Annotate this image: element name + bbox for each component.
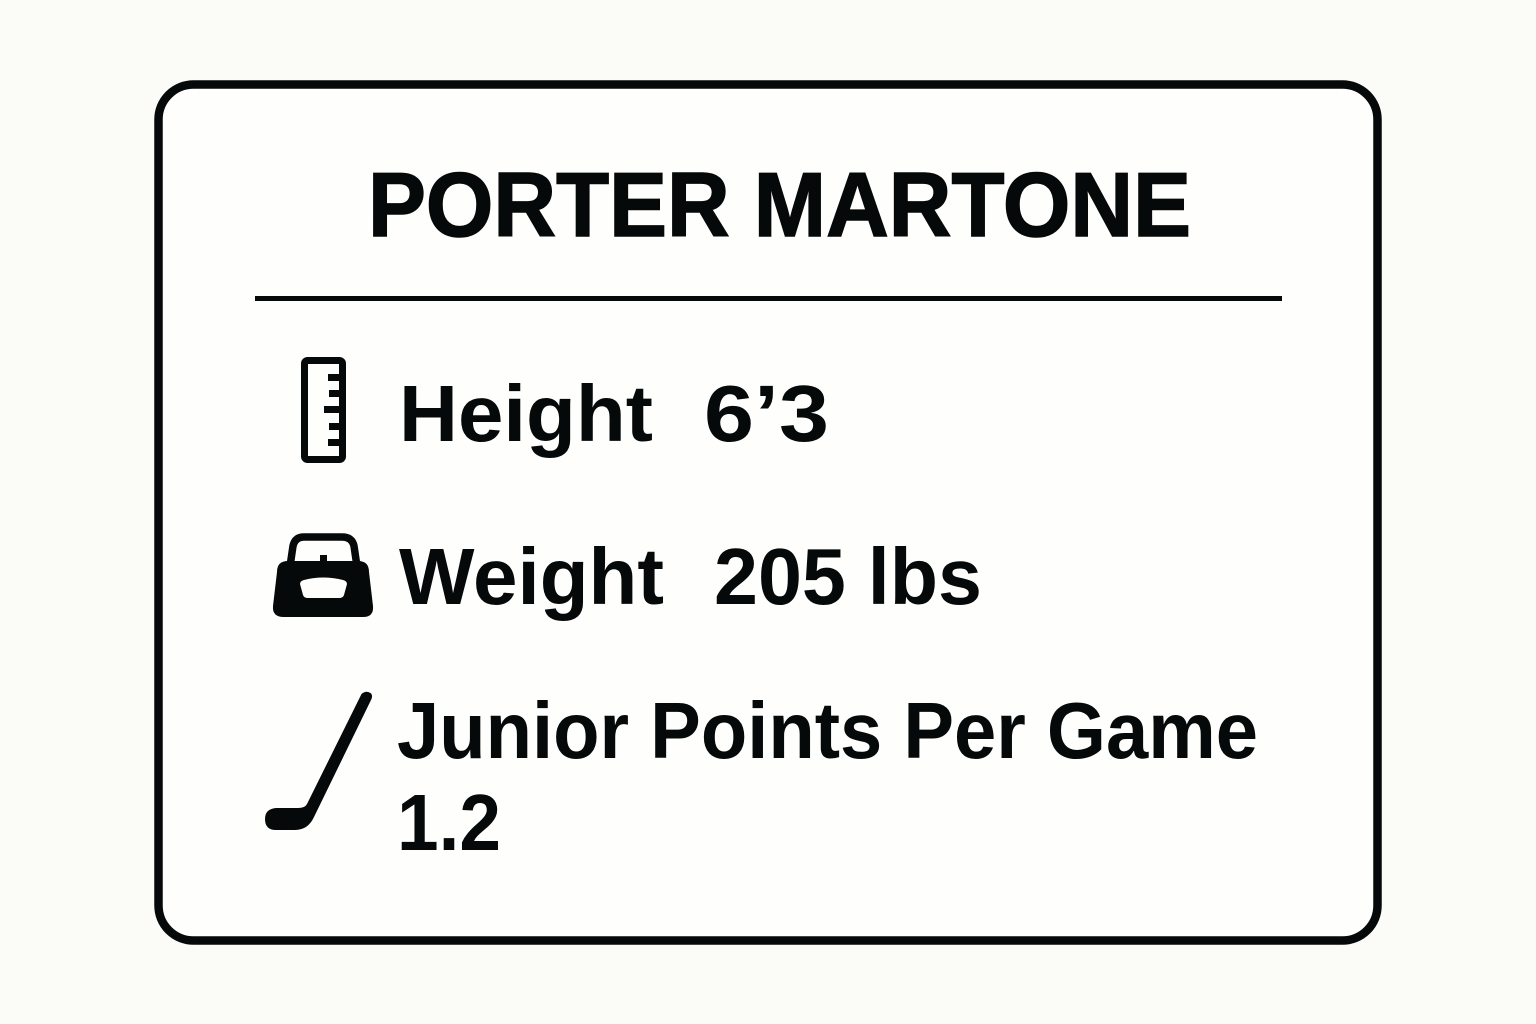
weight row: 205 lbs xyxy=(714,532,982,621)
points per game xyxy=(397,686,1258,867)
height row xyxy=(399,369,829,458)
height row: Height xyxy=(399,369,653,458)
icon: hockey bag xyxy=(273,537,373,617)
height row: 6’3 xyxy=(704,369,829,458)
icon: ruler xyxy=(304,360,342,460)
weight row xyxy=(399,532,982,621)
points per game: 1.2 xyxy=(397,778,501,867)
title: PORTER MARTONE xyxy=(368,155,1191,256)
points per game: Junior Points Per Game xyxy=(397,686,1258,775)
icon: hockey stick xyxy=(265,692,372,830)
panel: player card xyxy=(158,84,1378,940)
weight row: Weight xyxy=(399,532,664,621)
